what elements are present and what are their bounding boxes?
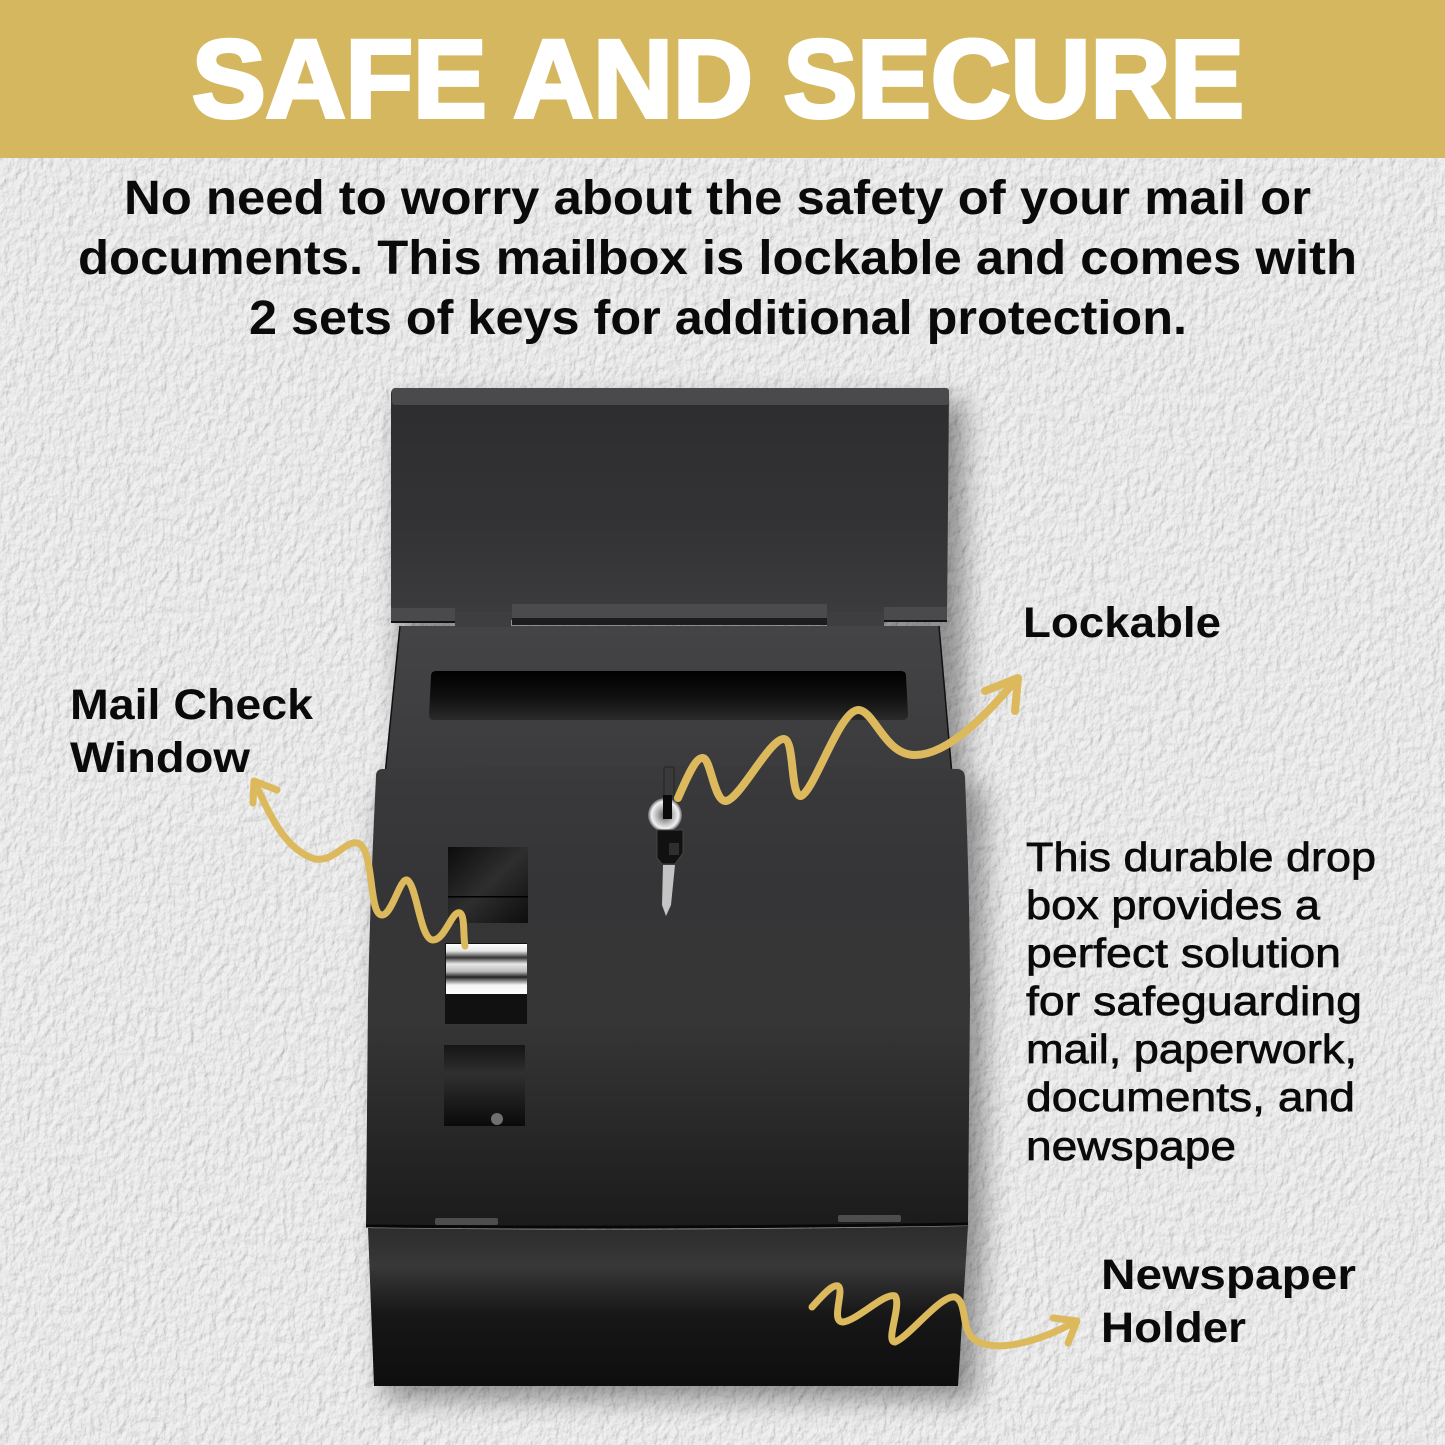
intro text block: No need to worry about the safety of your mail or bbox=[124, 172, 1311, 225]
label: newspaper holder: Newspaper bbox=[1101, 1251, 1356, 1299]
description text block: mail, paperwork, bbox=[1026, 1026, 1357, 1072]
arrow: lockable bbox=[678, 678, 1018, 801]
mail slot bbox=[429, 671, 908, 720]
door hinges bbox=[435, 1218, 498, 1225]
description text block: perfect solution bbox=[1026, 930, 1341, 976]
arrow: newspaper holder bbox=[812, 1286, 1077, 1346]
newspaper holder bbox=[366, 1215, 968, 1386]
window bottom bbox=[444, 1045, 525, 1126]
description text block: newspape bbox=[1026, 1123, 1236, 1169]
mailbox shadow bbox=[380, 400, 985, 1400]
label: newspaper holder: Holder bbox=[1101, 1304, 1246, 1352]
label: mail check window bbox=[70, 681, 313, 782]
label: mail check window: Mail Check bbox=[70, 681, 313, 729]
description text block: for safeguarding bbox=[1026, 978, 1362, 1024]
intro text block: documents. This mailbox is lockable and comes with bbox=[78, 232, 1357, 285]
title: SAFE AND SECURE bbox=[192, 18, 1244, 141]
banner background bbox=[0, 0, 1445, 158]
window middle with reflection bbox=[445, 943, 527, 1024]
arrow: mail check window bbox=[253, 781, 465, 946]
intro text block: 2 sets of keys for additional protection. bbox=[249, 292, 1187, 345]
open top lid bbox=[391, 388, 949, 623]
description text block bbox=[1026, 834, 1376, 1169]
front door bbox=[366, 766, 970, 1227]
intro text block bbox=[78, 172, 1357, 345]
lock and key bbox=[648, 767, 683, 916]
description text block: documents, and bbox=[1026, 1074, 1355, 1120]
back panel with mail slot bbox=[385, 626, 952, 775]
label: newspaper holder bbox=[1101, 1251, 1356, 1352]
label: lockable: Lockable bbox=[1023, 599, 1221, 647]
mailbox product bbox=[366, 388, 985, 1400]
lid hinges bbox=[455, 604, 884, 627]
label: mail check window: Window bbox=[70, 734, 251, 782]
title banner bbox=[0, 0, 1445, 158]
description text block: This durable drop bbox=[1026, 834, 1376, 880]
mail check windows bbox=[444, 847, 528, 1126]
description text block: box provides a bbox=[1026, 882, 1320, 928]
window top bbox=[448, 847, 528, 923]
